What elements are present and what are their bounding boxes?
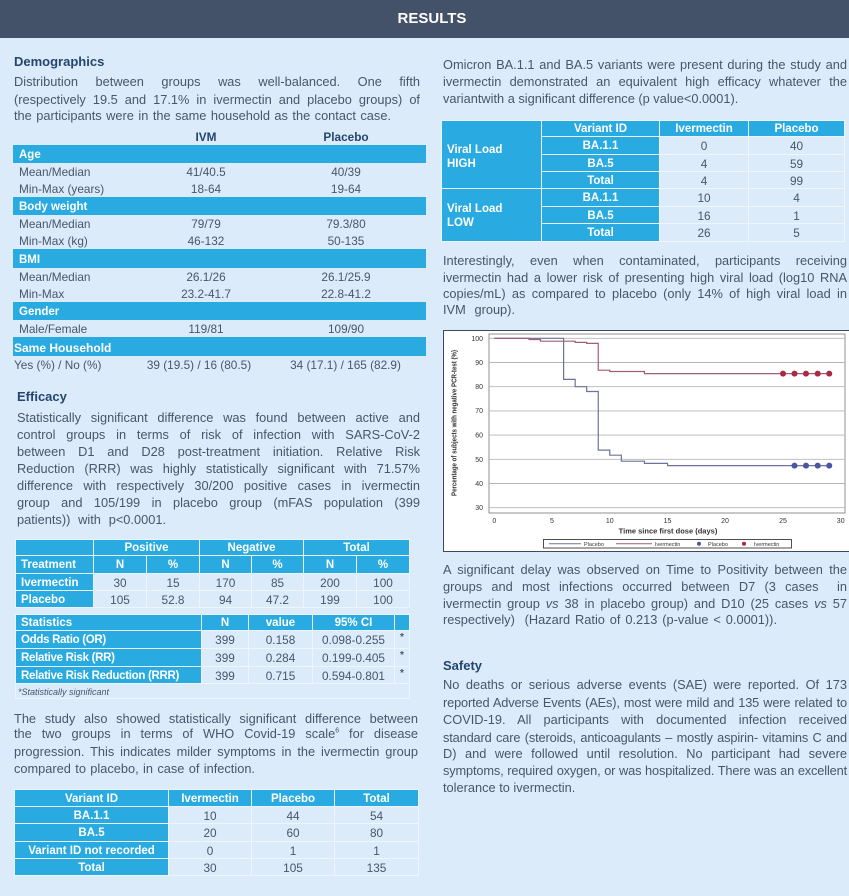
table: statistics: 0.199-0.405: [322, 651, 385, 665]
table: viral load by variant: 4: [701, 174, 707, 188]
table: variant totals: 10: [203, 808, 217, 822]
table: positive and negative cases: 100: [373, 576, 393, 590]
table: demographics: 22.8-41.2: [321, 287, 371, 301]
chart y axis labels: 60: [475, 432, 483, 440]
table: statistics: Odds Ratio (OR): [21, 634, 106, 646]
table: demographics: 46-132: [188, 234, 224, 248]
text: time to positivity paragraph: respectively) (Hazard Ratio of 0.213 (p-value < 0.0001)).: [443, 612, 777, 627]
table: demographics: IVM: [196, 130, 216, 144]
table: demographics: BMI: [19, 254, 40, 266]
markers: placebo censored: [792, 463, 832, 469]
text: disease progression paragraph: [14, 711, 418, 776]
table: positive and negative cases: [15, 539, 410, 608]
header bar: [0, 0, 849, 38]
table: variant totals: Variant ID not recorded: [28, 844, 155, 856]
chart x axis labels: 15: [664, 518, 671, 525]
table: demographics: 26.1/25.9: [321, 270, 371, 284]
table: viral load by variant: 26: [697, 226, 711, 240]
chart legend: [544, 540, 792, 548]
table: positive and negative cases: 47.2: [266, 592, 289, 606]
table: statistics: Statistics: [21, 617, 72, 629]
text: efficacy paragraph: [17, 410, 420, 527]
text: omicron paragraph: Omicron BA.1.1 and BA.5 variants were present during the study and: [443, 57, 847, 72]
table: variant totals: 20: [203, 826, 217, 840]
table: statistics: value: [266, 617, 295, 629]
chart y axis labels: [471, 336, 483, 512]
text: viral load paragraph: copies/mL) as compared to placebo (only 14% of high viral load in: [443, 286, 847, 301]
chart: time to positivity: [443, 330, 849, 552]
table: statistics: 0.594-0.801: [322, 668, 385, 682]
table: statistics: 0.098-0.255: [322, 633, 385, 647]
table: demographics: 23.2-41.7: [181, 287, 231, 301]
text: time to positivity paragraph: A significant delay was observed on Time to Positivity between the: [443, 562, 847, 577]
chart y axis labels: 30: [475, 505, 483, 512]
chart x axis labels: 0: [492, 518, 496, 525]
table: demographics: 34 (17.1) / 165 (82.9): [290, 358, 401, 372]
text: efficacy paragraph: patients)) with p<0.0001.: [17, 512, 166, 527]
chart y axis labels: 70: [475, 408, 483, 415]
chart y axis title: Percentage of subjects with negative PCR-test (%): [452, 350, 458, 496]
chart legend: Placebo: [584, 542, 604, 548]
table: variant totals: [14, 789, 419, 876]
table: positive and negative cases: 15: [166, 576, 180, 590]
table: demographics: 40/39: [331, 165, 361, 179]
table: positive and negative cases: N: [116, 559, 124, 571]
text: time to positivity paragraph: groups and most infections occurred between D7 (3 cases in: [443, 579, 847, 594]
table: demographics: Mean/Median: [19, 270, 90, 284]
table: demographics: 19-64: [331, 182, 361, 196]
table: viral load by variant: [441, 120, 845, 242]
table: demographics: 50-135: [328, 234, 364, 248]
chart legend: Placebo: [708, 542, 728, 548]
table: variant totals: Total: [363, 792, 390, 804]
table: variant totals: Ivermectin: [181, 792, 239, 804]
table: positive and negative cases: 100: [373, 592, 393, 606]
table: positive and negative cases: N: [326, 559, 334, 571]
table: statistics: 0.715: [266, 668, 295, 682]
table: positive and negative cases: %: [272, 559, 283, 571]
table: statistics: 0.284: [266, 651, 295, 665]
table: demographics: 79/79: [191, 217, 221, 231]
table: demographics: Mean/Median: [19, 165, 90, 179]
table: demographics: Age: [19, 149, 41, 161]
table: viral load by variant: BA.5: [587, 210, 614, 222]
chart legend: Ivermectin: [754, 542, 779, 548]
text: disease progression paragraph: the two groups in terms of WHO Covid-19 scale6 for disease: [14, 726, 418, 741]
line: placebo: [494, 338, 829, 466]
table: viral load by variant: 1: [793, 208, 800, 222]
text: time to positivity paragraph: ivermectin group vs 38 in placebo group) and D10 (25 cases vs 57: [443, 596, 847, 611]
table: variant totals: 60: [286, 826, 300, 840]
table: demographics: 79.3/80: [326, 217, 366, 231]
table: positive and negative cases: 105: [110, 592, 130, 606]
table: positive and negative cases: Treatment: [21, 559, 76, 571]
chart y axis labels: 80: [475, 384, 483, 391]
text: safety paragraph: No deaths or serious adverse events (SAE) were reported. Of 173: [443, 677, 847, 692]
text: demographics paragraph: (respectively 19.5 and 17.1% in ivermectin and placebo groups) of: [14, 92, 420, 107]
text: demographics paragraph: [14, 74, 420, 123]
chart x axis labels: 25: [779, 518, 787, 525]
table: viral load by variant: Total: [587, 227, 614, 239]
chart y axis labels: 90: [475, 360, 483, 367]
table: viral load by variant: Viral Load: [447, 203, 502, 215]
line: ivermectin: [494, 338, 829, 374]
text: demographics paragraph: the participants were in the same household as the contact case.: [14, 108, 391, 123]
table: variant totals: 1: [373, 844, 380, 858]
table: demographics: Body weight: [19, 201, 87, 213]
text: efficacy paragraph: between D1 and D28 post-treatment initiation. Relative Risk: [17, 444, 420, 459]
text: safety paragraph: D) and were followed until resolution. No participant had severe: [443, 746, 847, 761]
table: variant totals: Variant ID: [65, 792, 118, 804]
table: statistics: *: [400, 650, 404, 661]
heading: safety: Safety: [443, 658, 482, 673]
title: RESULTS: [398, 10, 466, 27]
table: statistics: 399: [215, 633, 235, 647]
table: demographics: Min-Max (kg): [19, 234, 88, 248]
table: statistics: 95% CI: [335, 617, 372, 629]
text: efficacy paragraph: Reduction (RRR) was highly statistically significant with 71.57%: [17, 461, 420, 476]
text: safety paragraph: standard care (steroids, anticoagulants – mostly aspirin- vitamins C and: [443, 730, 847, 745]
table: positive and negative cases: 52.8: [162, 592, 184, 606]
table: viral load by variant: 40: [790, 139, 803, 153]
table: demographics: Min-Max (years): [19, 182, 104, 196]
table: statistics: *: [400, 668, 404, 679]
table: statistics: *Statistically significant: [18, 686, 109, 696]
table: positive and negative cases: 30: [113, 576, 127, 590]
table: positive and negative cases: 199: [320, 592, 340, 606]
table: variant totals: Placebo: [271, 792, 315, 804]
markers: ivermectin censored: [780, 371, 832, 377]
chart x axis labels: 20: [721, 518, 729, 525]
table: demographics: 109/90: [328, 322, 364, 336]
heading: efficacy: Efficacy: [17, 389, 67, 404]
text: omicron paragraph: [443, 57, 847, 106]
table: demographics: Mean/Median: [19, 217, 90, 231]
table: viral load by variant: 4: [793, 191, 800, 205]
table: variant totals: BA.1.1: [74, 810, 109, 822]
table: viral load by variant: Total: [587, 174, 614, 186]
table: viral load by variant: HIGH: [447, 158, 476, 170]
table: positive and negative cases: 200: [320, 576, 340, 590]
table: positive and negative cases: 170: [216, 576, 235, 590]
table: variant totals: 0: [207, 844, 213, 858]
table: statistics: Relative Risk Reduction (RRR): [21, 670, 179, 682]
text: safety paragraph: reported Adverse Events (AEs), most were mild and 135 were related to: [443, 695, 847, 710]
table: demographics: Same Household: [14, 340, 111, 354]
text: omicron paragraph: variantwith a significant difference (p value<0.0001).: [443, 91, 738, 106]
table: variant totals: 105: [283, 860, 303, 874]
text: viral load paragraph: [443, 253, 847, 317]
text: viral load paragraph: Interestingly, even when contaminated, participants receiving: [443, 253, 847, 268]
table: statistics: 399: [215, 668, 235, 682]
chart y axis labels: 100: [471, 336, 483, 343]
text: efficacy paragraph: group and 105/199 in placebo group (mFAS population (399: [17, 495, 420, 510]
table: viral load by variant: 5: [793, 226, 800, 240]
chart x axis labels: 5: [550, 518, 554, 525]
table: demographics: 119/81: [188, 322, 224, 336]
table: variant totals: 30: [203, 860, 217, 874]
table: demographics: Gender: [19, 306, 59, 318]
table: demographics: Placebo: [323, 130, 369, 144]
table: statistics: [15, 614, 410, 699]
text: safety paragraph: tolerance to ivermectin.: [443, 780, 575, 795]
table: variant totals: Total: [78, 862, 105, 874]
table: variant totals: 135: [367, 860, 386, 874]
table: demographics: 26.1/26: [186, 270, 226, 284]
table: viral load by variant: Placebo: [774, 123, 819, 135]
table: positive and negative cases: Placebo: [21, 594, 65, 606]
table: viral load by variant: 16: [697, 208, 711, 222]
text: safety paragraph: symptoms, required oxygen, or was hospitalized. There was an excellent: [443, 763, 847, 778]
table: viral load by variant: 10: [697, 191, 711, 205]
text: omicron paragraph: ivermectin demonstrated an equivalent high efficacy whatever the: [443, 74, 847, 89]
text: time to positivity paragraph: [443, 562, 847, 627]
table: statistics: *: [400, 632, 404, 643]
text: efficacy paragraph: difference with respectively 30/200 positive cases in ivermectin: [17, 478, 420, 493]
table: viral load by variant: BA.1.1: [583, 192, 618, 204]
table: variant totals: BA.5: [78, 827, 105, 839]
text: demographics paragraph: Distribution between groups was well-balanced. One fifth: [14, 74, 420, 89]
table: demographics: 39 (19.5) / 16 (80.5): [147, 358, 251, 372]
table: positive and negative cases: 94: [219, 592, 232, 606]
table: positive and negative cases: Positive: [124, 542, 169, 554]
table: demographics: Male/Female: [19, 322, 87, 336]
chart x axis labels: 10: [606, 518, 614, 525]
text: disease progression paragraph: progression. This indicates milder symptoms in the ivermectin group: [14, 744, 418, 759]
table: viral load by variant: BA.1.1: [583, 140, 618, 152]
table: positive and negative cases: Negative: [228, 542, 275, 554]
text: disease progression paragraph: compared to placebo, in case of infection.: [14, 761, 255, 776]
text: efficacy paragraph: Statistically significant difference was found between active and: [17, 410, 420, 425]
table: variant totals: 54: [370, 808, 383, 822]
heading: demographics: Demographics: [14, 54, 104, 69]
table: variant totals: 80: [370, 826, 383, 840]
table: viral load by variant: BA.5: [587, 158, 614, 170]
table: viral load by variant: LOW: [447, 217, 474, 229]
table: statistics: N: [221, 617, 229, 629]
table: demographics: 41/40.5: [186, 165, 226, 179]
table: positive and negative cases: %: [378, 559, 388, 571]
text: safety paragraph: [443, 677, 848, 795]
table: positive and negative cases: Ivermectin: [21, 576, 79, 588]
table: demographics: Min-Max: [19, 287, 64, 301]
table: viral load by variant: 99: [790, 174, 803, 188]
table: statistics: 0.158: [266, 633, 295, 647]
table: demographics: 18-64: [191, 182, 221, 196]
table: viral load by variant: 4: [701, 156, 707, 170]
table: statistics: Relative Risk (RR): [21, 652, 115, 664]
text: viral load paragraph: ivermectin had a lower risk of presenting high viral load (log10 RNA: [443, 270, 847, 285]
text: efficacy paragraph: control groups in terms of risk of infection with SARS-CoV-2: [17, 427, 420, 442]
table: viral load by variant: 59: [790, 156, 803, 170]
table: viral load by variant: Viral Load: [447, 144, 502, 156]
table: positive and negative cases: %: [168, 559, 178, 571]
table: variant totals: 44: [286, 808, 300, 822]
table: demographics: Yes (%) / No (%): [14, 358, 101, 372]
table: positive and negative cases: 85: [271, 576, 284, 590]
table: positive and negative cases: Total: [343, 542, 370, 554]
text: disease progression paragraph: The study also showed statistically significant difference between: [14, 711, 418, 726]
table: variant totals: 1: [290, 844, 296, 858]
table: statistics: 399: [215, 651, 235, 665]
chart x axis title: Time since first dose (days): [619, 526, 718, 536]
table: viral load by variant: 0: [701, 139, 707, 153]
table: viral load by variant: Variant ID: [574, 123, 627, 135]
chart y axis labels: 40: [475, 481, 483, 488]
text: viral load paragraph: IVM group).: [443, 302, 515, 317]
text: safety paragraph: COVID-19. All participants with documented infection received: [443, 712, 847, 727]
table: demographics: [13, 130, 426, 372]
table: viral load by variant: Ivermectin: [675, 123, 733, 135]
chart x axis labels: [492, 518, 845, 525]
chart y axis labels: 50: [475, 457, 483, 464]
table: positive and negative cases: N: [221, 559, 230, 571]
chart legend: Ivermectin: [655, 542, 680, 548]
chart x axis labels: 30: [837, 518, 845, 525]
